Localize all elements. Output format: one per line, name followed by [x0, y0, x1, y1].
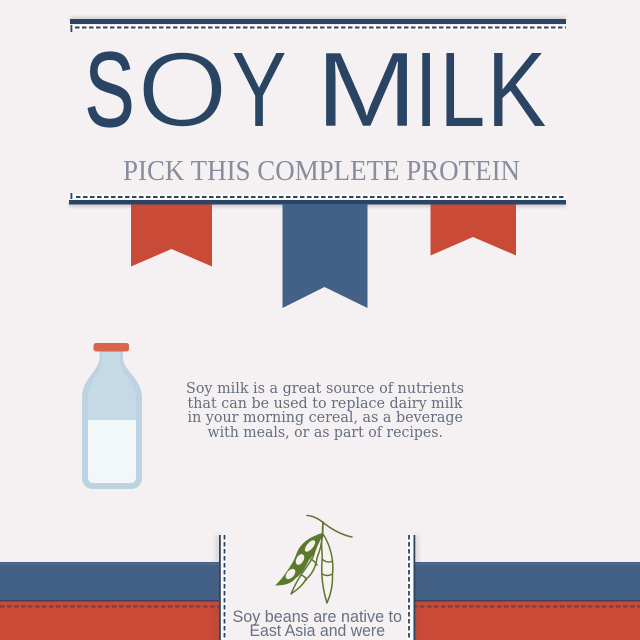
footer band: red — [0, 602, 640, 640]
ribbon: left red — [131, 204, 212, 266]
title: K — [487, 30, 546, 149]
title: Y — [232, 31, 287, 149]
title: S — [85, 31, 134, 149]
ribbon: right red — [430, 204, 516, 256]
title: M — [316, 31, 417, 149]
intro text: that can be used to replace dairy milk — [188, 394, 463, 412]
intro text: with meals, or as part of recipes. — [208, 423, 443, 441]
centre panel — [216, 535, 418, 640]
title: L — [440, 31, 485, 150]
title: O — [137, 30, 228, 149]
intro text: Soy milk is a great source of nutrients — [186, 379, 464, 397]
subtitle: PICK THIS COMPLETE PROTEIN — [123, 156, 520, 187]
header top rule — [70, 17, 566, 32]
footer band: blue — [0, 562, 640, 602]
title: I — [415, 31, 438, 149]
intro text — [186, 379, 464, 441]
icon: milk bottle — [82, 343, 142, 489]
soy bean text — [232, 608, 402, 640]
soy bean text: East Asia and were — [250, 622, 385, 640]
header bottom rule — [69, 193, 566, 207]
icon: soy bean pods — [275, 516, 352, 603]
soy bean text: Soy beans are native to — [232, 608, 402, 626]
title — [85, 30, 546, 150]
ribbon: centre blue — [282, 204, 368, 308]
intro text: in your morning cereal, as a beverage — [188, 408, 463, 426]
